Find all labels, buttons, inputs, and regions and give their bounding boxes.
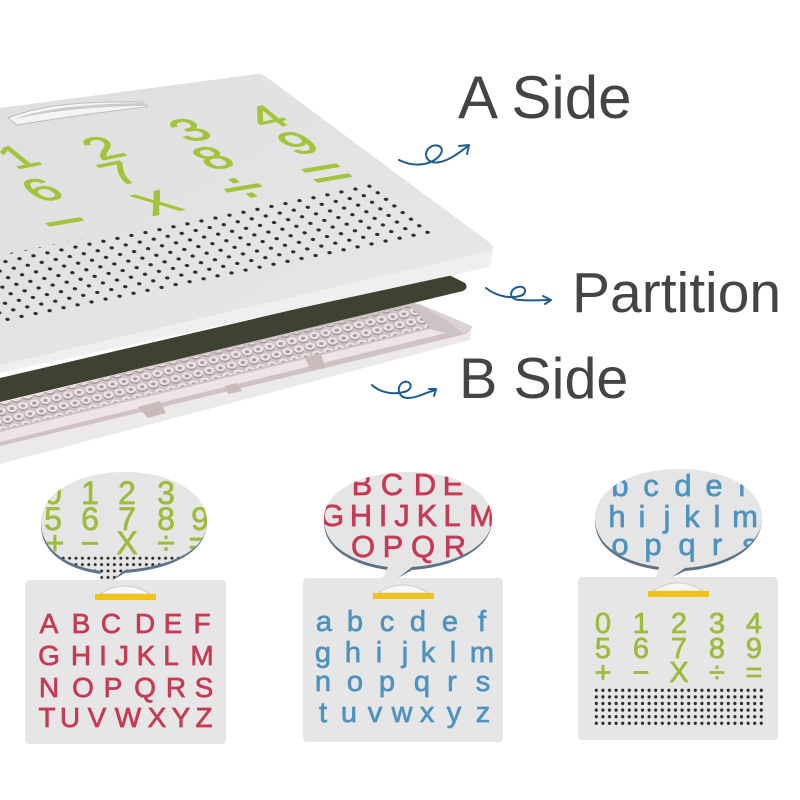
dot grid <box>0 183 436 326</box>
tilted numbers on the board: 4 <box>234 98 301 136</box>
bubble: numbers: 56789 <box>44 501 209 537</box>
exploded view of the board <box>0 74 493 464</box>
board: uppercase letters: NOPQRS <box>39 672 213 703</box>
bubble: uppercase letters: GHIJKLM <box>320 498 495 533</box>
A side board <box>0 74 493 373</box>
board: uppercase letters: ABCDEF <box>40 608 211 639</box>
tilted numbers on the board: = <box>279 147 374 198</box>
board: numbers and dot grid: 01234 <box>595 608 762 640</box>
tilted numbers on the board: X <box>121 184 194 223</box>
tilted numbers on the board: − <box>17 196 112 247</box>
handle <box>95 586 156 600</box>
tilted numbers on the board: 2 <box>70 129 137 167</box>
board: lowercase letters: ghijklm <box>315 637 494 669</box>
carrying handle cut-out <box>8 102 147 125</box>
tilted numbers on the board: 9 <box>265 124 332 162</box>
board: uppercase letters <box>25 580 226 744</box>
board: lowercase letters <box>303 578 503 742</box>
tilted numbers on the board: 3 <box>157 111 224 149</box>
arrow to A Side <box>399 145 469 165</box>
bubble: lowercase letters: opqrs <box>611 527 758 562</box>
tilted numbers on the board: 7 <box>87 154 154 192</box>
B side tray <box>0 302 472 464</box>
board: uppercase letters: TUVWXYZ <box>38 702 213 733</box>
label: A Side: A Side <box>458 64 631 131</box>
arrow to Partition <box>486 287 551 304</box>
partition sheet <box>0 275 467 402</box>
tilted numbers on the board: 8 <box>180 139 247 177</box>
arrow to B Side <box>372 382 436 398</box>
board: uppercase letters: GHIJKLM <box>38 640 214 671</box>
board: lowercase letters: tuvwxyz <box>319 697 490 729</box>
board: lowercase letters: nopqrs <box>315 666 490 698</box>
bubble: uppercase letters: OPQR <box>351 529 466 564</box>
bubble: uppercase letters: BCDE <box>352 467 463 502</box>
board: numbers and dot grid: 56789 <box>595 633 762 665</box>
product 3: numbers board with lowercase bubble <box>578 465 778 740</box>
label: Partition: Partition <box>572 261 781 325</box>
handle <box>373 585 434 599</box>
bubble: numbers: +−X÷= <box>46 525 207 561</box>
label: B Side: B Side <box>459 347 628 411</box>
product 1: uppercase board with numbers bubble <box>25 468 226 744</box>
board: numbers and dot grid: +−X÷= <box>595 657 762 689</box>
board: lowercase letters: abcdef <box>316 606 487 638</box>
tilted numbers on the board <box>0 98 374 247</box>
bubble: numbers <box>38 468 210 583</box>
handle <box>648 583 709 597</box>
bubble: numbers: 0123 <box>44 475 175 511</box>
dot grid <box>593 687 764 727</box>
bubble: lowercase letters <box>595 469 762 577</box>
tilted numbers on the board: 6 <box>9 171 76 209</box>
bubble: lowercase letters: hijklm <box>608 499 758 534</box>
tilted numbers on the board: ÷ <box>196 162 289 213</box>
bubble: lowercase letters: bcdef <box>611 468 747 503</box>
product 2: lowercase board with uppercase bubble <box>303 467 503 742</box>
board: numbers and dot grid <box>578 577 778 740</box>
bubble: uppercase letters <box>324 472 492 578</box>
